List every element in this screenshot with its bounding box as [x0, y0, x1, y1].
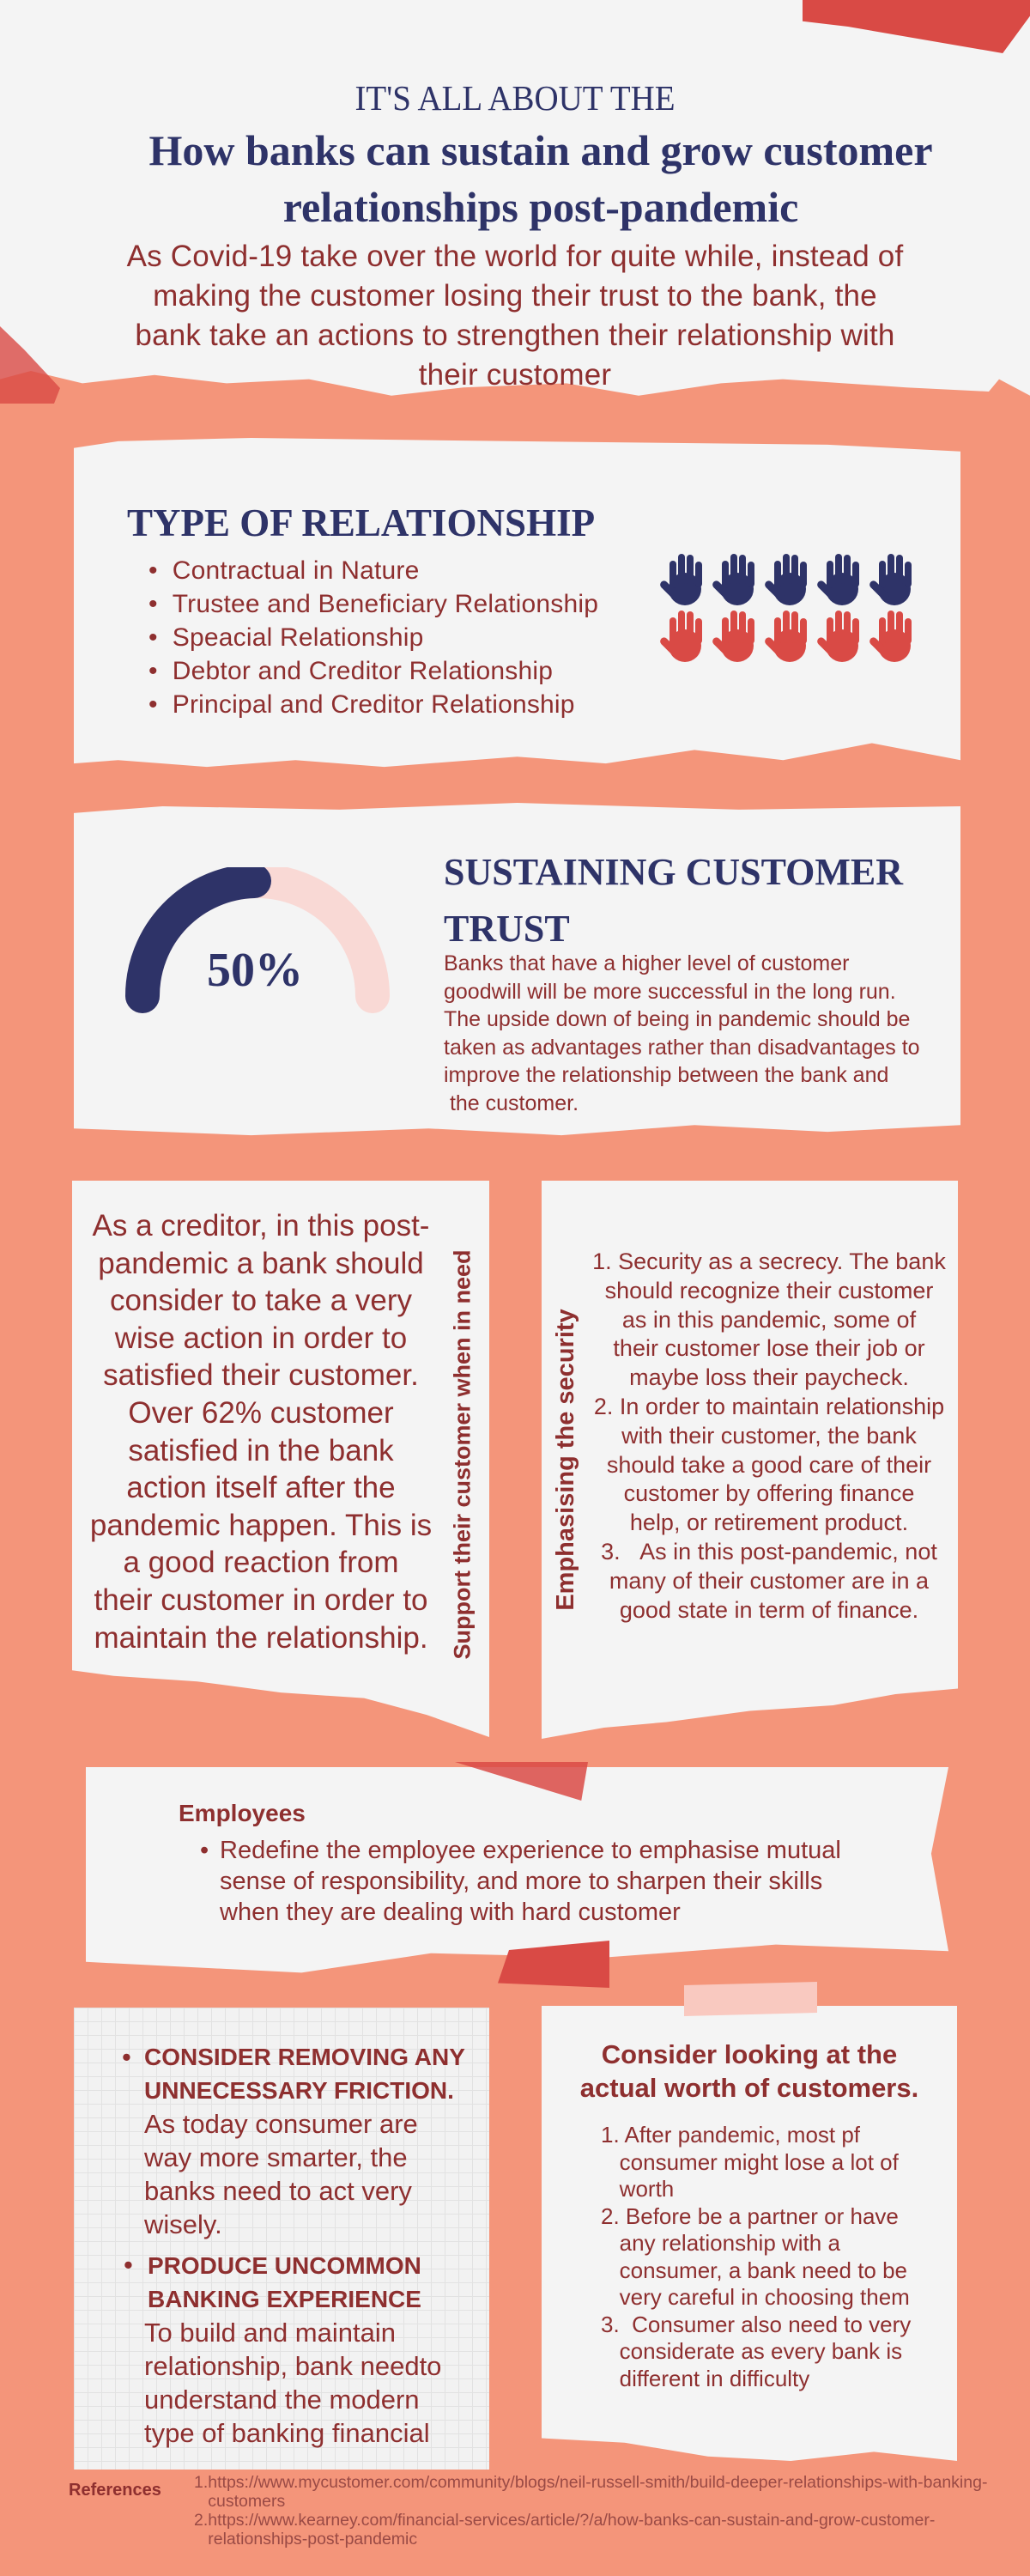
text: reference links [194, 2473, 987, 2549]
intro text: As Covid-19 take over the world for quite while, instead of [127, 240, 903, 273]
list: relationship types: • Speacial Relationship [148, 623, 424, 652]
intro text: making the customer losing their trust to the bank, the [153, 279, 877, 313]
title: IT'S ALL ABOUT THE [354, 78, 676, 118]
heading: type of relationship: TYPE OF RELATIONSHIP [127, 501, 595, 544]
text: reference links: 1.https://www.mycustomer.com/community/blogs/neil-russell-smith/build-deeper-relationships-with-banking- [194, 2473, 987, 2492]
text: creditor paragraph: satisfied their customer. [103, 1358, 419, 1392]
heading: sustaining customer trust: TRUST [444, 908, 570, 950]
decoration: pink scrap on worth panel [684, 1982, 817, 2016]
list: relationship types: • Principal and Creditor Relationship [148, 690, 575, 719]
text: creditor paragraph: their customer in order to [94, 1583, 428, 1617]
list: worth points: 3. Consumer also need to very [601, 2312, 911, 2337]
text: reference links: 2.https://www.kearney.com/financial-services/article/?/a/how-banks-can-sustain-and-grow-customer- [194, 2511, 935, 2530]
list: security points [594, 1252, 946, 1623]
headline: How banks can sustain and grow customer [148, 126, 933, 174]
list: security points: 1. Security as a secrecy. The bank [592, 1249, 946, 1274]
stat: 50%: 50% [207, 944, 303, 997]
list: security points: should recognize their customer [605, 1278, 933, 1303]
list: relationship types: • Trustee and Beneficiary Relationship [148, 590, 598, 618]
intro text: their customer [419, 358, 611, 392]
heading: consider looking at actual worth [580, 2044, 917, 2097]
text: sustaining trust body: goodwill will be more successful in the long run. [444, 979, 896, 1003]
list: security points: 2. In order to maintain relationship [594, 1394, 944, 1419]
text: reference links: customers [208, 2492, 285, 2511]
text: creditor paragraph [92, 1214, 431, 1654]
list: relationship types [149, 560, 597, 718]
list: security points: with their customer, the bank [621, 1423, 917, 1449]
list: worth points: worth [620, 2176, 674, 2202]
text: reference links: relationships-post-pandemic [208, 2530, 417, 2549]
decoration: top right torn paper [803, 0, 1030, 53]
text: creditor paragraph: As a creditor, in this post- [93, 1209, 429, 1242]
panel: support their customer [72, 1181, 489, 1737]
text: employees bullet: sense of responsibility, and more to sharpen their skills [220, 1868, 822, 1895]
text: friction bullets: UNNECESSARY FRICTION. [144, 2077, 454, 2104]
chart: gauge 50% [125, 867, 390, 1013]
headline [148, 126, 933, 231]
list: security points: as in this pandemic, some of [622, 1307, 916, 1333]
panel: employees [86, 1767, 948, 1984]
text: employees bullet: when they are dealing with hard customer [220, 1899, 681, 1926]
list: security points: help, or retirement product. [630, 1510, 908, 1535]
decoration: left side scraps [0, 326, 60, 404]
panel: actual worth of customers [542, 2006, 957, 2461]
list: security points: customer by offering finance [624, 1480, 914, 1506]
heading: consider looking at actual worth: actual worth of customers. [580, 2073, 918, 2103]
intro text [127, 240, 903, 392]
list: worth points: considerate as every bank is [620, 2338, 902, 2364]
text: employees bullet: • [200, 1837, 209, 1864]
text: friction bullets: • [124, 2250, 133, 2280]
text: friction bullets: wisely. [144, 2209, 222, 2239]
list: worth points [602, 2126, 912, 2391]
text: friction bullets: PRODUCE UNCOMMON [148, 2252, 421, 2279]
text: creditor paragraph: pandemic happen. This is [90, 1509, 432, 1542]
text: friction bullets: way more smarter, the [144, 2142, 408, 2172]
text: friction bullets: BANKING EXPERIENCE [148, 2286, 421, 2312]
text: creditor paragraph: wise action in order to [115, 1321, 407, 1355]
list: security points: 3. As in this post-pandemic, not [601, 1539, 937, 1564]
text: friction bullets: understand the modern [144, 2385, 420, 2415]
text: creditor paragraph: Over 62% customer [128, 1396, 394, 1430]
heading: consider looking at actual worth: Consider looking at the [602, 2039, 897, 2069]
vertical heading: emphasising the security: Emphasising the security [552, 1309, 579, 1611]
headline: relationships post-pandemic [283, 183, 798, 231]
list: security points: should take a good care of their [607, 1452, 931, 1478]
text: friction bullets: As today consumer are [144, 2109, 418, 2139]
list: worth points: different in difficulty [620, 2365, 809, 2391]
text: employees bullet [201, 1840, 839, 1925]
text: sustaining trust body [444, 955, 918, 1110]
text: friction bullets: • [122, 2042, 131, 2072]
text: friction bullets: To build and maintain [144, 2318, 396, 2348]
panel: friction and banking experience [74, 2008, 489, 2470]
list: worth points: consumer might lose a lot of [620, 2148, 899, 2174]
list: worth points: very careful in choosing them [620, 2284, 910, 2310]
text: creditor paragraph: a good reaction from [123, 1546, 398, 1579]
panel: sustaining customer trust [74, 803, 960, 1142]
text: creditor paragraph: action itself after the [126, 1471, 396, 1504]
heading: employees: Employees [179, 1800, 306, 1826]
text: friction bullets: CONSIDER REMOVING ANY [144, 2044, 465, 2070]
list: worth points: 1. After pandemic, most pf [601, 2122, 860, 2148]
text: friction bullets: banks need to act very [144, 2176, 412, 2206]
list: security points: good state in term of finance. [620, 1597, 918, 1623]
text: sustaining trust body: Banks that have a higher level of customer [444, 951, 850, 975]
text: sustaining trust body: improve the relationship between the bank and [444, 1063, 888, 1087]
text: friction bullets: relationship, bank needto [144, 2351, 441, 2381]
intro text: bank take an actions to strengthen their relationship with [135, 319, 895, 352]
list: worth points: consumer, a bank need to be [620, 2257, 907, 2282]
text: creditor paragraph: consider to take a very [110, 1284, 412, 1317]
icon: hands [660, 554, 912, 662]
list: security points: maybe loss their paycheck. [629, 1364, 909, 1390]
header background [0, 0, 1030, 412]
heading: sustaining customer trust [445, 859, 903, 942]
list: security points: their customer lose their job or [613, 1335, 925, 1361]
text: sustaining trust body: taken as advantages rather than disadvantages to [444, 1036, 920, 1060]
heading: references: References [69, 2481, 161, 2500]
list: worth points: 2. Before be a partner or have [601, 2203, 899, 2229]
text: creditor paragraph: satisfied in the bank [128, 1434, 394, 1467]
text: friction bullets: type of banking financial [144, 2418, 430, 2448]
text: sustaining trust body: the customer. [450, 1091, 579, 1115]
panel: type of relationship [74, 434, 960, 774]
panel: emphasising the security [542, 1181, 958, 1739]
references [69, 2473, 987, 2549]
vertical heading: support their customer when in need: Support their customer when in need [450, 1249, 476, 1660]
list: relationship types: • Contractual in Nature [148, 556, 419, 585]
text: creditor paragraph: pandemic a bank should [98, 1247, 424, 1280]
decoration: red scrap on employees panel [498, 1941, 609, 1988]
text: friction bullets [122, 2042, 465, 2448]
list: worth points: any relationship with a [620, 2230, 840, 2256]
text: sustaining trust body: The upside down of being in pandemic should be [444, 1007, 910, 1031]
list: security points: many of their customer are in a [609, 1568, 929, 1594]
text: creditor paragraph: maintain the relationship. [94, 1621, 428, 1655]
list: relationship types: • Debtor and Creditor Relationship [148, 657, 553, 685]
text: employees bullet: Redefine the employee experience to emphasise mutual [220, 1837, 841, 1864]
heading: sustaining customer trust: SUSTAINING CUSTOMER [444, 851, 903, 893]
